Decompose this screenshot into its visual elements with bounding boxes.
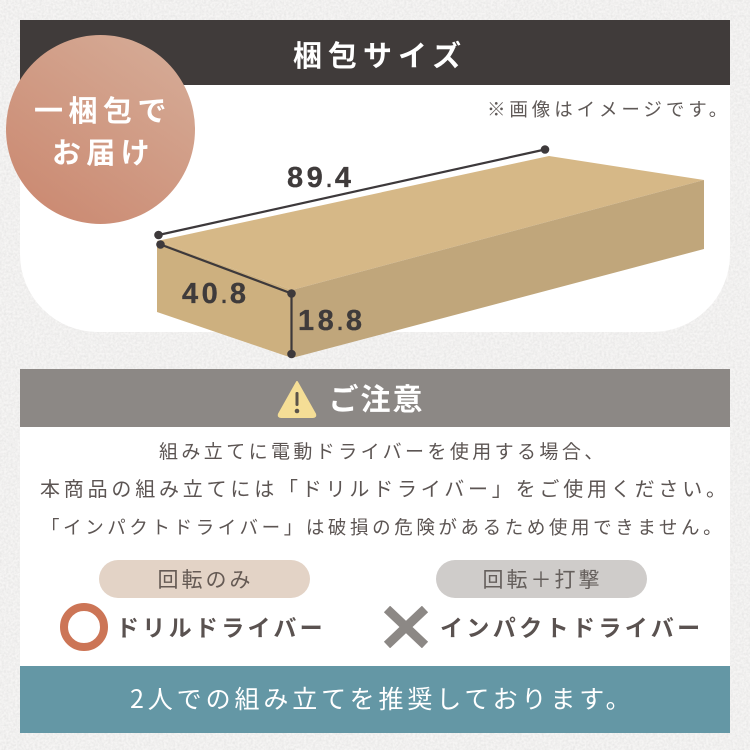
label: impact driver: インパクトドライバー: [440, 609, 704, 643]
badge line 2: お届け: [52, 130, 155, 172]
panel: caution: [20, 369, 730, 733]
pill: rotation only: [99, 560, 310, 598]
dimension label: height: 18.8: [298, 305, 365, 337]
dimension line: depth: [156, 240, 296, 298]
dimension line: width: [154, 145, 549, 239]
diagram: cardboard box with dimensions: [154, 145, 704, 358]
heading: package size: 梱包サイズ: [293, 33, 467, 75]
icon: cross ng: [384, 606, 428, 648]
panel: package size: [20, 20, 730, 332]
icon: warning triangle: [278, 381, 316, 418]
heading bar: [20, 20, 730, 85]
text: caution line 1: 組み立てに電動ドライバーを使用する場合、: [159, 437, 607, 464]
note: image is illustrative: ※画像はイメージです。: [487, 96, 731, 122]
panel background: [20, 20, 730, 332]
recommendation bar: [20, 666, 730, 733]
box top face: [157, 156, 704, 290]
badge: delivered in one package: [6, 35, 195, 224]
pill label: rotation plus impact: 回転＋打撃: [482, 564, 602, 594]
badge line 1: 一梱包で: [34, 88, 172, 130]
caution heading bar: [20, 369, 730, 427]
pill label: rotation only: 回転のみ: [158, 564, 254, 594]
heading: caution: ご注意: [328, 375, 424, 419]
text: caution line 2: 本商品の組み立てには「ドリルドライバー」をご使用ください。: [40, 473, 730, 502]
pill: rotation plus impact: [436, 560, 647, 598]
dimension line: height: [287, 294, 296, 358]
dimension label: width: 89.4: [287, 162, 354, 194]
label: drill driver: ドリルドライバー: [116, 609, 326, 643]
box left face: [157, 241, 292, 358]
icon: circle ok: [60, 603, 108, 651]
text: two-person assembly recommended: 2人での組み立てを推奨しております。: [130, 680, 635, 716]
text: caution line 3: 「インパクトドライバー」は破損の危険があるため使用できません。: [41, 514, 725, 540]
box right face: [292, 180, 704, 358]
dimension label: depth: 40.8: [182, 278, 249, 310]
